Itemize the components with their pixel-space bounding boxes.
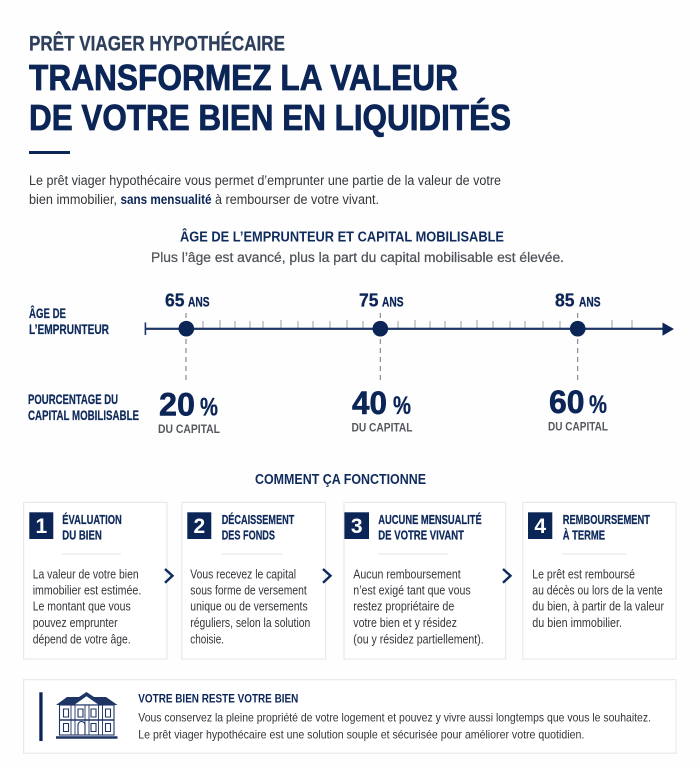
title bbox=[29, 57, 511, 138]
step 1 text: Le montant que vous bbox=[33, 600, 131, 614]
step 1 title: ÉVALUATION bbox=[62, 512, 122, 527]
intro text: bien immobilier, bbox=[29, 192, 117, 207]
step 4 title: REMBOURSEMENT bbox=[563, 512, 650, 527]
step 2 text: Vous recevez le capital bbox=[190, 567, 296, 581]
step 1 text bbox=[33, 567, 141, 646]
step 2 title bbox=[222, 512, 294, 542]
age label 65 bbox=[165, 290, 210, 310]
row label: percentage: CAPITAL MOBILISABLE bbox=[28, 407, 139, 423]
intro text bbox=[29, 173, 501, 207]
percentage 40: DU CAPITAL bbox=[352, 420, 412, 434]
panel: your property stays yours bbox=[24, 680, 676, 753]
age label 75: ANS bbox=[382, 294, 404, 310]
step 2 text: sous forme de versement bbox=[190, 584, 307, 598]
step 4 text: Le prêt est remboursé bbox=[532, 567, 635, 581]
step 1 text: immobilier est estimée. bbox=[33, 584, 141, 598]
icon: house bbox=[56, 692, 118, 738]
panel text: Le prêt viager hypothécaire est une solution souple et sécurisée pour améliorer votre quotidien. bbox=[138, 727, 584, 741]
intro text: sans mensualité bbox=[120, 192, 212, 207]
step 4 title bbox=[563, 512, 650, 542]
title rule bbox=[29, 151, 70, 154]
row label: age: ÂGE DE bbox=[29, 304, 66, 321]
step 3 badge: 3 bbox=[351, 515, 363, 538]
arrow: step 2 to 3 bbox=[323, 569, 330, 583]
step 3 text: restez propriétaire de bbox=[353, 600, 454, 614]
age label 65: 65 bbox=[165, 290, 184, 310]
panel text bbox=[138, 711, 651, 741]
step 3 card bbox=[344, 502, 506, 659]
step 2 title: DES FONDS bbox=[222, 527, 275, 542]
step 2 text bbox=[190, 567, 310, 646]
percentage 20: % bbox=[200, 394, 218, 422]
step 3 text: (ou y résidez partiellement). bbox=[353, 632, 484, 646]
percentage 40: 40 bbox=[352, 385, 387, 421]
section heading: age and capital bbox=[151, 228, 564, 265]
arrow head bbox=[662, 322, 674, 336]
step 4 badge: 4 bbox=[534, 515, 546, 538]
step 3 badge bbox=[344, 512, 369, 539]
title: TRANSFORMEZ LA VALEUR bbox=[29, 57, 458, 98]
step 4 text: du bien, à partir de la valeur bbox=[532, 600, 664, 614]
marker 85 bbox=[570, 321, 586, 337]
percentage 60: 60 bbox=[549, 384, 584, 420]
intro text: Le prêt viager hypothécaire vous permet d’emprunter une partie de la valeur de votre bbox=[29, 173, 501, 188]
row label: age bbox=[29, 304, 109, 337]
step 3 text: n’est exigé tant que vous bbox=[353, 584, 471, 598]
section heading: how it works: COMMENT ÇA FONCTIONNE bbox=[255, 472, 426, 488]
age label 75 bbox=[359, 290, 404, 310]
section heading: age and capital: ÂGE DE L’EMPRUNTEUR ET CAPITAL MOBILISABLE bbox=[180, 228, 504, 246]
marker 75 bbox=[372, 321, 388, 337]
step 3 text: votre bien et y résidez bbox=[353, 616, 457, 630]
step 1 text: La valeur de votre bien bbox=[33, 567, 139, 581]
step 1 text: dépend de votre âge. bbox=[33, 632, 131, 646]
percentage 60: % bbox=[589, 391, 607, 419]
title: DE VOTRE BIEN EN LIQUIDITÉS bbox=[29, 97, 511, 138]
step 4 title: À TERME bbox=[563, 527, 605, 542]
step 2 text: réguliers, selon la solution bbox=[190, 616, 310, 630]
percentage 60: DU CAPITAL bbox=[548, 420, 608, 434]
percentage 20: 20 bbox=[159, 386, 195, 422]
step 2 badge: 2 bbox=[193, 515, 205, 538]
step 4 card bbox=[523, 502, 676, 659]
age label 85: ANS bbox=[579, 294, 600, 310]
step 3 text: Aucun remboursement bbox=[353, 567, 461, 581]
step 4 text: au décès ou lors de la vente bbox=[532, 584, 663, 598]
row label: percentage bbox=[28, 391, 139, 423]
step 3 text bbox=[353, 567, 484, 646]
section heading: age and capital: Plus l’âge est avancé, plus la part du capital mobilisable est élevée. bbox=[151, 250, 564, 265]
age label 85: 85 bbox=[555, 290, 574, 310]
step 2 text: choisie. bbox=[190, 632, 224, 646]
step 3 title: DE VOTRE VIVANT bbox=[378, 527, 464, 542]
step 1 title bbox=[62, 512, 122, 542]
step 4 text bbox=[532, 567, 664, 630]
timeline bbox=[145, 313, 674, 384]
step 1 badge bbox=[29, 512, 53, 539]
step 4 text: du bien immobilier. bbox=[532, 616, 622, 630]
step 1 text: pouvez emprunter bbox=[33, 616, 118, 630]
arrow: step 1 to 2 bbox=[165, 569, 172, 583]
step 3 title bbox=[378, 512, 482, 542]
header bbox=[29, 30, 511, 207]
step 2 title: DÉCAISSEMENT bbox=[222, 512, 294, 527]
percentage 40 bbox=[352, 385, 412, 434]
step 1 card bbox=[24, 502, 167, 659]
step 4 badge bbox=[528, 512, 552, 539]
intro text: à rembourser de votre vivant. bbox=[215, 192, 379, 207]
step 2 text: unique ou de versements bbox=[190, 600, 308, 614]
row label: percentage: POURCENTAGE DU bbox=[28, 391, 118, 407]
step 1 title: DU BIEN bbox=[62, 527, 102, 542]
percentage 60 bbox=[548, 384, 608, 434]
step 2 badge bbox=[187, 512, 211, 539]
age label 65: ANS bbox=[188, 294, 210, 310]
age label 85 bbox=[555, 290, 600, 310]
percentage 20 bbox=[158, 386, 220, 436]
step 1 badge: 1 bbox=[35, 515, 47, 538]
step 3 title: AUCUNE MENSUALITÉ bbox=[378, 512, 482, 527]
row label: age: L’EMPRUNTEUR bbox=[29, 321, 109, 337]
kicker: PRÊT VIAGER HYPOTHÉCAIRE bbox=[29, 30, 285, 56]
panel heading: VOTRE BIEN RESTE VOTRE BIEN bbox=[138, 693, 298, 705]
step 2 card bbox=[182, 502, 326, 659]
age label 75: 75 bbox=[359, 290, 378, 310]
percentage 20: DU CAPITAL bbox=[158, 422, 220, 436]
arrow: step 3 to 4 bbox=[503, 569, 510, 583]
percentage 40: % bbox=[393, 392, 411, 420]
marker 65 bbox=[178, 321, 194, 337]
